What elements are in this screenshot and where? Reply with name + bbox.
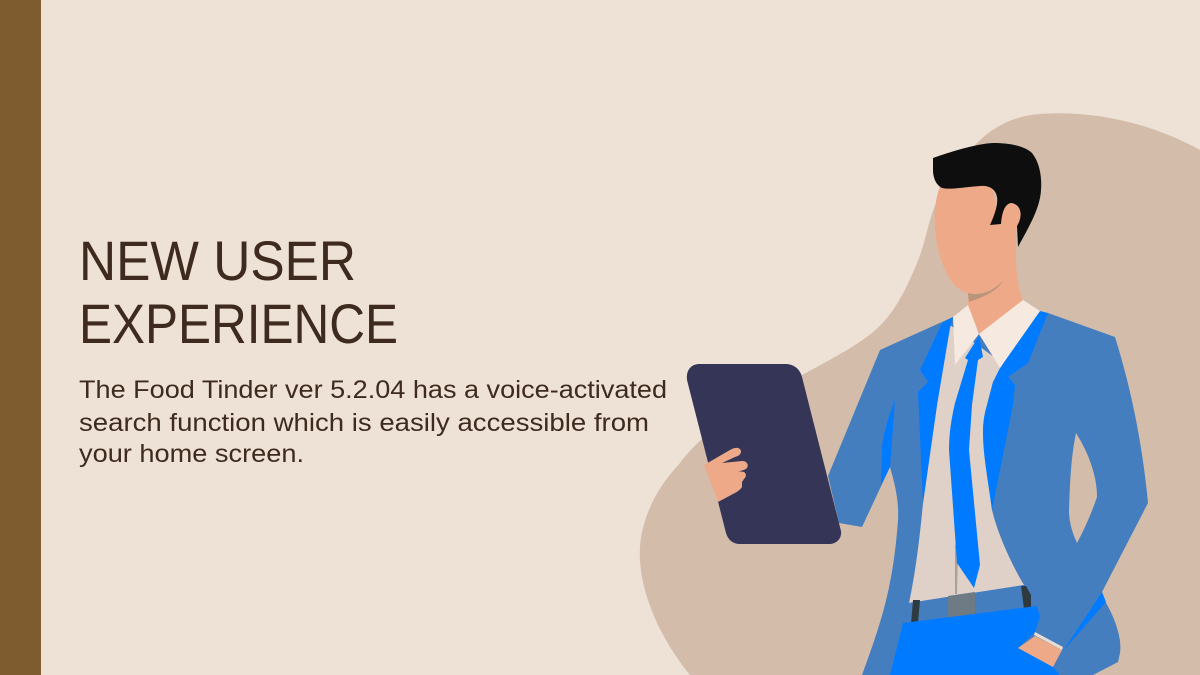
body text: The Food Tinder ver 5.2.04 has a voice-activated [79,376,667,404]
ear [1001,203,1022,232]
face [935,186,1016,294]
illustration: businessman [687,143,1148,675]
title: NEW USER [79,229,356,292]
shirt [909,325,1024,603]
hand in pocket [1018,636,1062,667]
body text: your home screen. [79,440,304,468]
hair [933,143,1041,247]
hand on tablet [704,448,748,502]
tablet [687,364,841,544]
shirt centre line [955,545,958,594]
right cuff lining [1063,592,1106,651]
collar right [979,300,1040,368]
arm gap [1069,433,1097,543]
belt [903,585,1032,624]
belt loop left [911,600,920,624]
sidebar [0,0,41,675]
body text [79,376,667,468]
belt buckle [948,592,975,618]
jacket side lining [881,400,895,485]
neck [968,225,1023,336]
trousers [890,606,1060,675]
jacket [828,313,1148,675]
body text: search function which is easily accessible from [79,409,649,437]
left lapel lining [918,317,953,503]
tie [949,336,983,588]
belt loop right [1021,586,1031,609]
neck shadow [968,281,1003,302]
shirt cuff [1034,632,1063,650]
collar left [953,305,979,365]
background blob [640,113,1200,675]
title [79,229,398,355]
right lapel lining [983,311,1048,510]
title: EXPERIENCE [79,292,398,355]
